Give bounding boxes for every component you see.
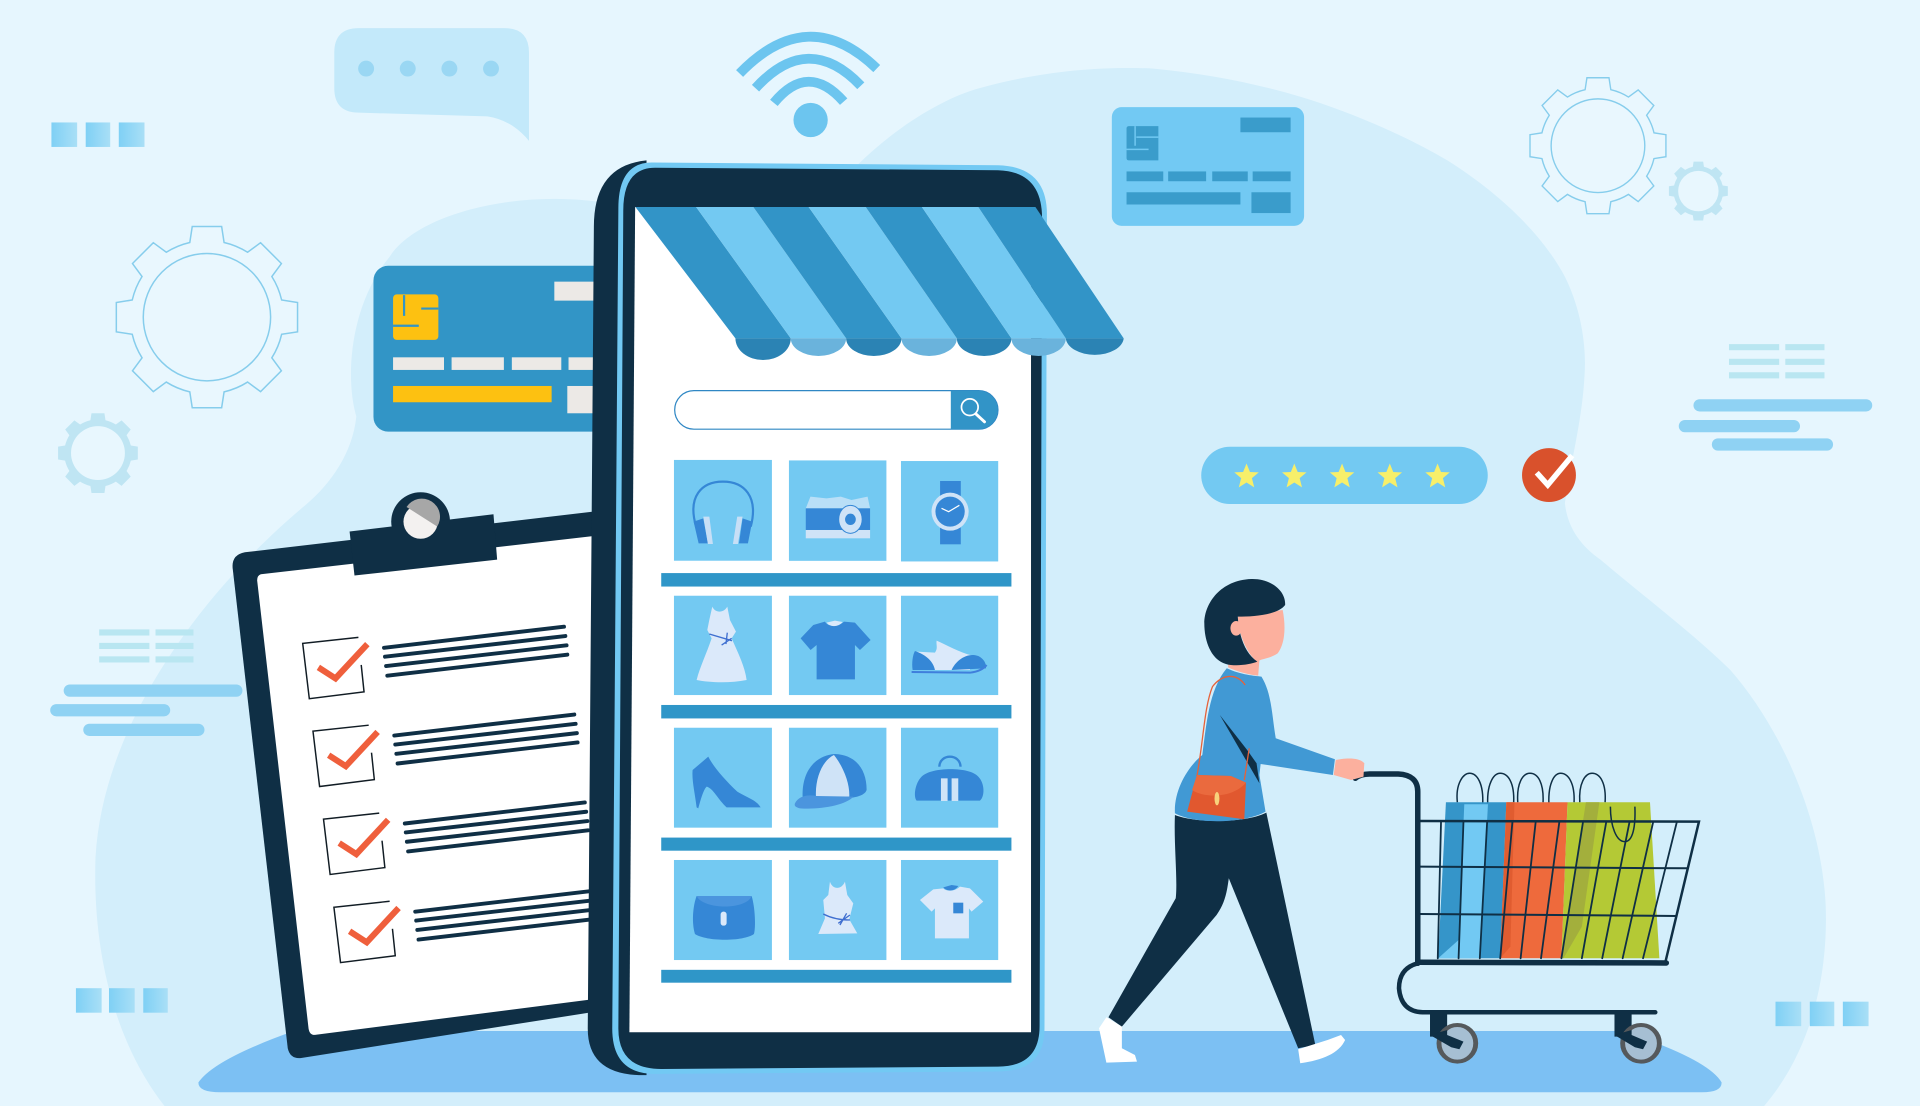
icons row one bbox=[693, 481, 969, 544]
small credit card bbox=[1112, 107, 1304, 226]
squares top left bbox=[51, 122, 144, 147]
woman shopper bbox=[1099, 579, 1364, 1063]
paper bbox=[257, 534, 612, 1035]
shopping cart and bags bbox=[1355, 773, 1699, 1062]
icon: small gear right bbox=[1669, 162, 1728, 220]
search bar bbox=[675, 391, 998, 429]
card number and stripes bbox=[393, 282, 605, 413]
icons rows two to four bbox=[692, 607, 987, 940]
smartphone bbox=[588, 160, 1124, 1075]
check badge bbox=[1522, 448, 1576, 502]
icon: t-shirt bbox=[801, 621, 871, 679]
shopping bags bbox=[1438, 773, 1659, 958]
orange bag bbox=[1500, 802, 1568, 958]
ear bbox=[1230, 621, 1242, 636]
icon: dress bbox=[697, 607, 747, 682]
blue bag bbox=[1438, 802, 1506, 958]
rating pill with stars bbox=[1201, 447, 1488, 504]
checklist item 3 bbox=[324, 802, 588, 874]
icon: pocket tee bbox=[920, 885, 983, 938]
icon: large gear left bbox=[116, 227, 298, 408]
chat bubble bbox=[334, 28, 529, 141]
sweater bbox=[1175, 668, 1335, 821]
clipboard bbox=[233, 492, 612, 1058]
awning stripes bbox=[635, 207, 791, 338]
wheels bbox=[1430, 1013, 1659, 1062]
checklist item 1 bbox=[303, 627, 567, 699]
icon: purse bbox=[693, 896, 755, 940]
icon: camera bbox=[806, 497, 870, 538]
awning scallops bbox=[735, 338, 1124, 360]
bag handles bbox=[1457, 773, 1605, 808]
phone light rim bbox=[612, 162, 1047, 1074]
icon: large gear right bbox=[1530, 78, 1666, 214]
shoes bbox=[1099, 1017, 1345, 1063]
icon: duffel bag bbox=[915, 757, 983, 801]
hand bbox=[1334, 758, 1364, 780]
squares bottom left bbox=[76, 988, 168, 1013]
trousers bbox=[1108, 813, 1315, 1048]
neck bbox=[1228, 660, 1259, 676]
text lines decoration right bbox=[1679, 344, 1872, 451]
handbag bbox=[1187, 676, 1249, 819]
checklist item 4 bbox=[334, 891, 599, 963]
icon: sneaker bbox=[912, 641, 987, 673]
icon: tank top bbox=[818, 882, 857, 934]
icon: high heel bbox=[692, 757, 761, 808]
icon: cap bbox=[795, 754, 867, 809]
arm shadow bbox=[1220, 715, 1259, 783]
ground bbox=[198, 1031, 1722, 1092]
green bag bbox=[1561, 802, 1659, 958]
cart frame bbox=[1355, 774, 1699, 1012]
clip bbox=[350, 492, 497, 576]
icon: headphones bbox=[693, 482, 753, 544]
icon: wifi bbox=[740, 37, 877, 137]
icon: small gear left bbox=[58, 413, 138, 493]
hair bbox=[1204, 579, 1285, 665]
checklist item 2 bbox=[313, 715, 578, 787]
phone back bbox=[588, 160, 647, 1075]
phone dark frame bbox=[618, 168, 1042, 1069]
card chip bbox=[393, 294, 438, 340]
awning bbox=[635, 207, 1124, 360]
face bbox=[1238, 610, 1284, 662]
icon: watch bbox=[932, 481, 969, 544]
large credit card bbox=[373, 266, 618, 432]
phone screen bbox=[629, 207, 1031, 1032]
shelf bars bbox=[661, 573, 1011, 983]
board bbox=[233, 509, 612, 1058]
product tiles bbox=[674, 460, 998, 960]
squares bottom right bbox=[1776, 1002, 1869, 1026]
text lines decoration left bbox=[50, 629, 242, 736]
